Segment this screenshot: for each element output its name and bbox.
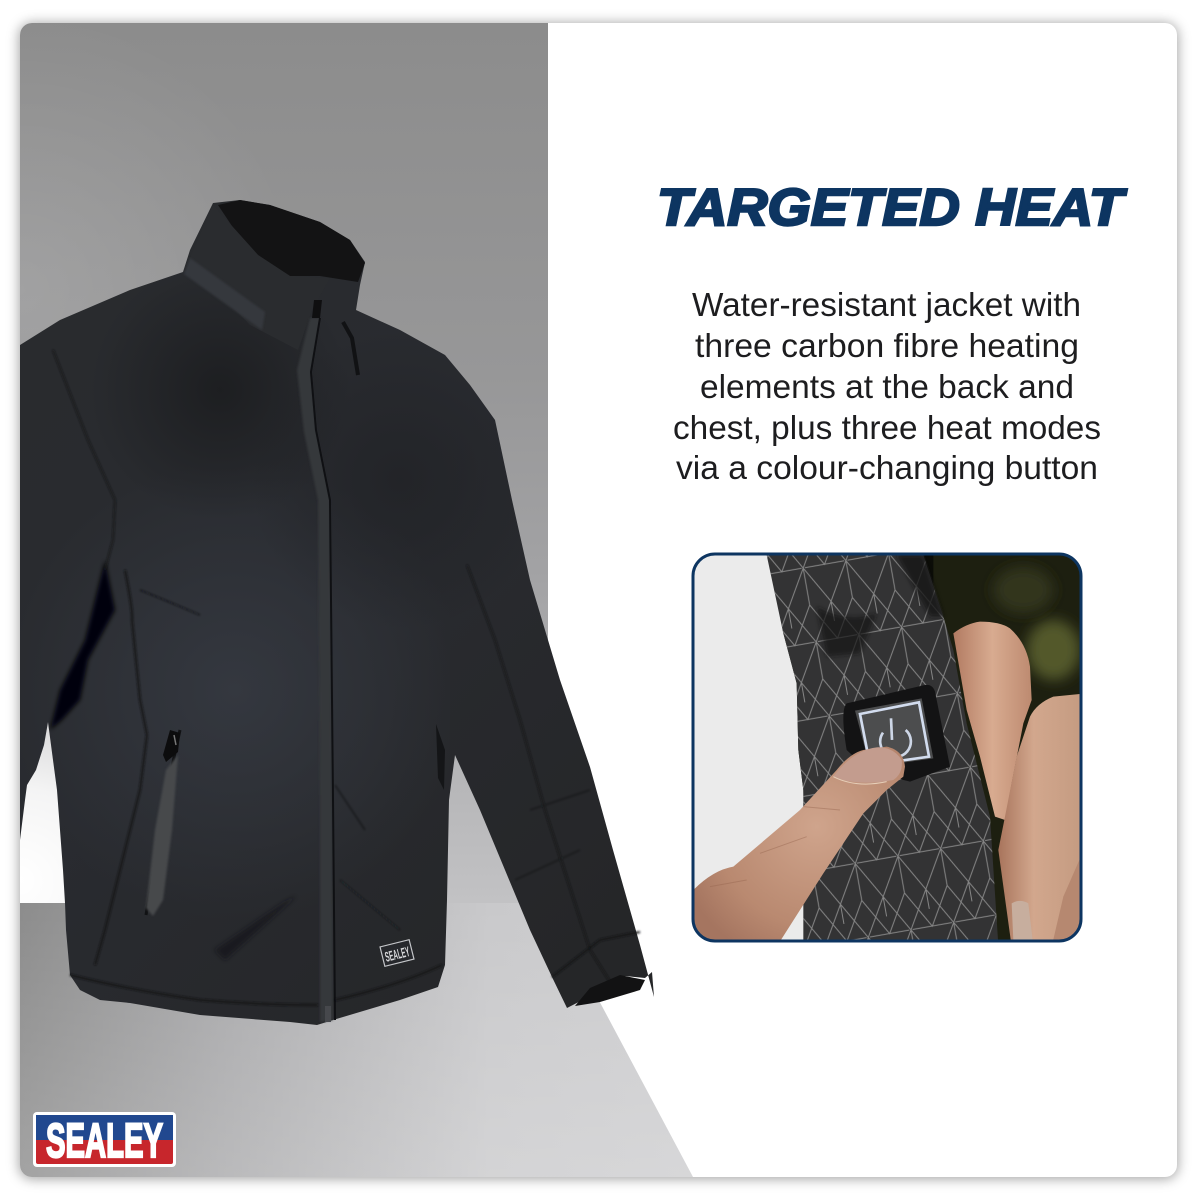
- dark foliage background: [782, 556, 1080, 940]
- collar outer face: [188, 205, 330, 350]
- right hand pocket: [436, 724, 445, 790]
- backdrop wall: [20, 23, 548, 903]
- jacket sealey label: [380, 940, 414, 966]
- fingernail: [1012, 901, 1033, 940]
- sealey logo: [33, 1112, 176, 1168]
- jacket sealey label: SEALEY: [383, 943, 412, 965]
- panel: studio backdrop: [20, 23, 693, 1177]
- ring finger: [998, 694, 1080, 940]
- inset photo: heat control button: [690, 550, 1087, 947]
- little finger: [1054, 860, 1080, 940]
- jacket seams and wrinkles: [53, 350, 640, 1005]
- chest pocket zipper: [343, 322, 358, 375]
- power icon: [880, 730, 911, 757]
- title: TARGETED HEAT: [657, 179, 1128, 237]
- middle finger: [953, 622, 1032, 820]
- collar strap: [184, 258, 265, 330]
- description text: Water-resistant jacket with: [692, 286, 1081, 323]
- inset photo border: [693, 554, 1081, 941]
- jacket shading: [48, 337, 356, 810]
- description text: elements at the back and: [700, 368, 1074, 405]
- pressing thumb: [693, 747, 905, 947]
- jacket body silhouette: [20, 200, 654, 1025]
- left hand pocket: [146, 730, 180, 916]
- white towel: [690, 550, 807, 945]
- backdrop floor: [20, 903, 693, 1177]
- main zipper placket: [297, 300, 335, 1022]
- jacket photo: [20, 200, 654, 1025]
- description text: three carbon fibre heating: [695, 327, 1079, 364]
- description text: [673, 286, 1101, 486]
- patterned lining fabric: [767, 555, 998, 945]
- collar inner lining: [218, 200, 365, 282]
- cuff opening: [575, 975, 645, 1006]
- description text: chest, plus three heat modes: [673, 409, 1101, 446]
- power button: [843, 685, 950, 782]
- lower crease: [215, 899, 289, 960]
- description text: via a colour-changing button: [676, 449, 1098, 486]
- sealey logo: SEALEY: [46, 1115, 163, 1168]
